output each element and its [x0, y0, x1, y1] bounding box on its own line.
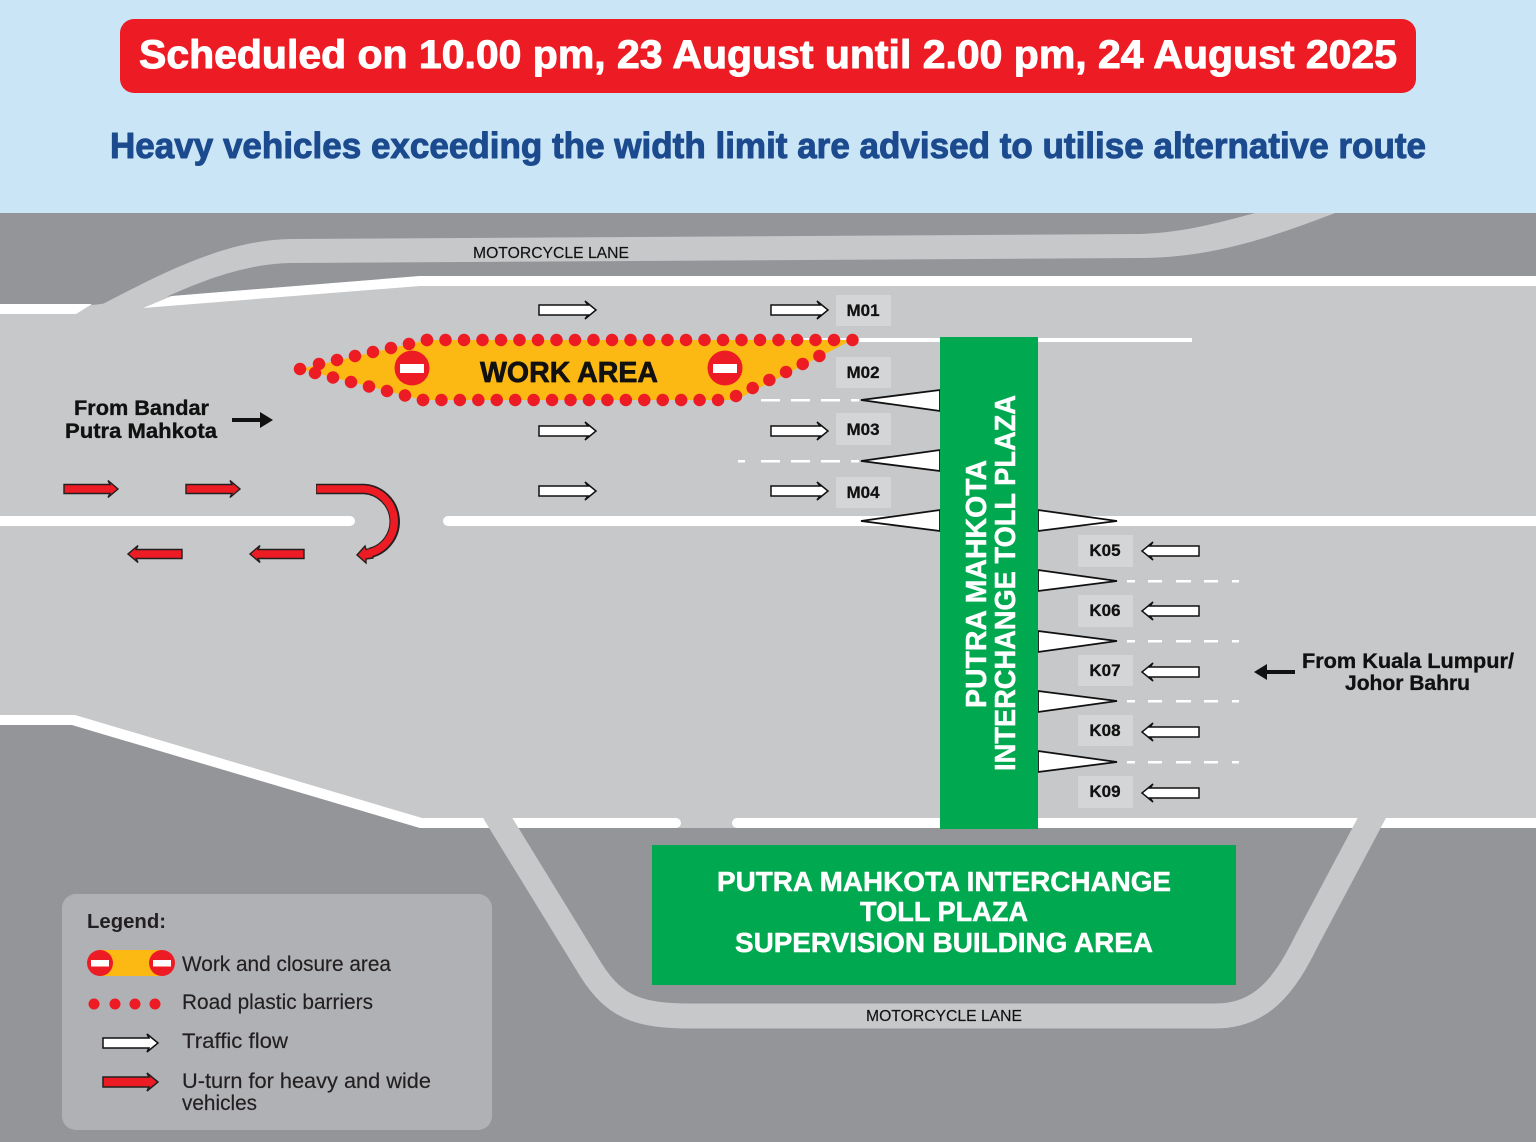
legend: work and closure area: Work and closure area [182, 953, 391, 976]
traffic flow arrows eastbound [539, 301, 828, 500]
arrow: westbound direction [1254, 664, 1295, 680]
upper motorcycle lane [95, 213, 1335, 308]
legend: work and closure area [87, 950, 391, 976]
from Kuala Lumpur label: From Kuala Lumpur/ [1302, 650, 1514, 673]
icon: no entry left [394, 350, 430, 386]
legend: road plastic barriers: Road plastic barriers [182, 991, 373, 1014]
toll plaza bar: PUTRA MAHKOTA [961, 460, 993, 708]
supervision building [652, 845, 1236, 985]
from Kuala Lumpur label [1302, 650, 1514, 695]
road surface [0, 276, 1536, 828]
lane labels M: M03 [846, 420, 880, 439]
schedule banner: Scheduled on 10.00 pm, 23 August until 2.00 pm, 24 August 2025 [139, 33, 1397, 77]
supervision building: TOLL PLAZA [860, 896, 1028, 927]
legend: road plastic barriers [88, 991, 373, 1014]
traffic flow arrows westbound [1142, 542, 1199, 802]
supervision building: PUTRA MAHKOTA INTERCHANGE [717, 866, 1171, 897]
upper motorcycle lane label: MOTORCYCLE LANE [473, 245, 629, 262]
toll plaza bar [940, 337, 1038, 829]
lane labels M: M04 [846, 483, 880, 502]
u-turn curve arrow [316, 489, 395, 563]
lower motorcycle lane label: MOTORCYCLE LANE [866, 1008, 1022, 1025]
from Bandar Putra Mahkota label: Putra Mahkota [65, 420, 217, 443]
road edge lines [0, 276, 1536, 828]
schedule banner [120, 19, 1416, 93]
lane labels K: K07 [1089, 661, 1121, 680]
legend: u-turn: U-turn for heavy and wide [182, 1070, 431, 1093]
legend: u-turn: vehicles [182, 1092, 257, 1115]
advisory text: Heavy vehicles exceeding the width limit are advised to utilise alternative route [110, 125, 1426, 166]
lane labels K: K09 [1089, 782, 1121, 801]
work area label: WORK AREA [480, 357, 658, 389]
legend panel [62, 894, 492, 1130]
from Bandar Putra Mahkota label [65, 397, 217, 443]
lower motorcycle lane [494, 812, 1375, 1016]
lane dashes [738, 399, 1239, 764]
icon: no entry right [708, 350, 742, 386]
lane labels K: K06 [1089, 601, 1121, 620]
lane labels M: M01 [846, 301, 880, 320]
lane labels M: M02 [846, 363, 880, 382]
legend title: Legend: [87, 911, 166, 933]
legend: traffic flow [103, 1030, 289, 1053]
arrow: eastbound direction [232, 412, 273, 428]
from Kuala Lumpur label: Johor Bahru [1345, 672, 1470, 695]
legend: u-turn [103, 1070, 431, 1115]
header background [0, 0, 1536, 213]
u-turn red arrows [64, 480, 304, 562]
lane labels K: K05 [1089, 541, 1121, 560]
from Bandar Putra Mahkota label: From Bandar [74, 397, 209, 420]
toll booth island markers [861, 390, 1117, 772]
supervision building: SUPERVISION BUILDING AREA [735, 927, 1153, 958]
work area [300, 340, 860, 400]
lane labels K: K08 [1089, 721, 1121, 740]
lane labels K [1078, 535, 1133, 808]
toll plaza bar: INTERCHANGE TOLL PLAZA [990, 395, 1022, 771]
legend: traffic flow: Traffic flow [182, 1030, 289, 1053]
lane labels M [836, 295, 891, 508]
